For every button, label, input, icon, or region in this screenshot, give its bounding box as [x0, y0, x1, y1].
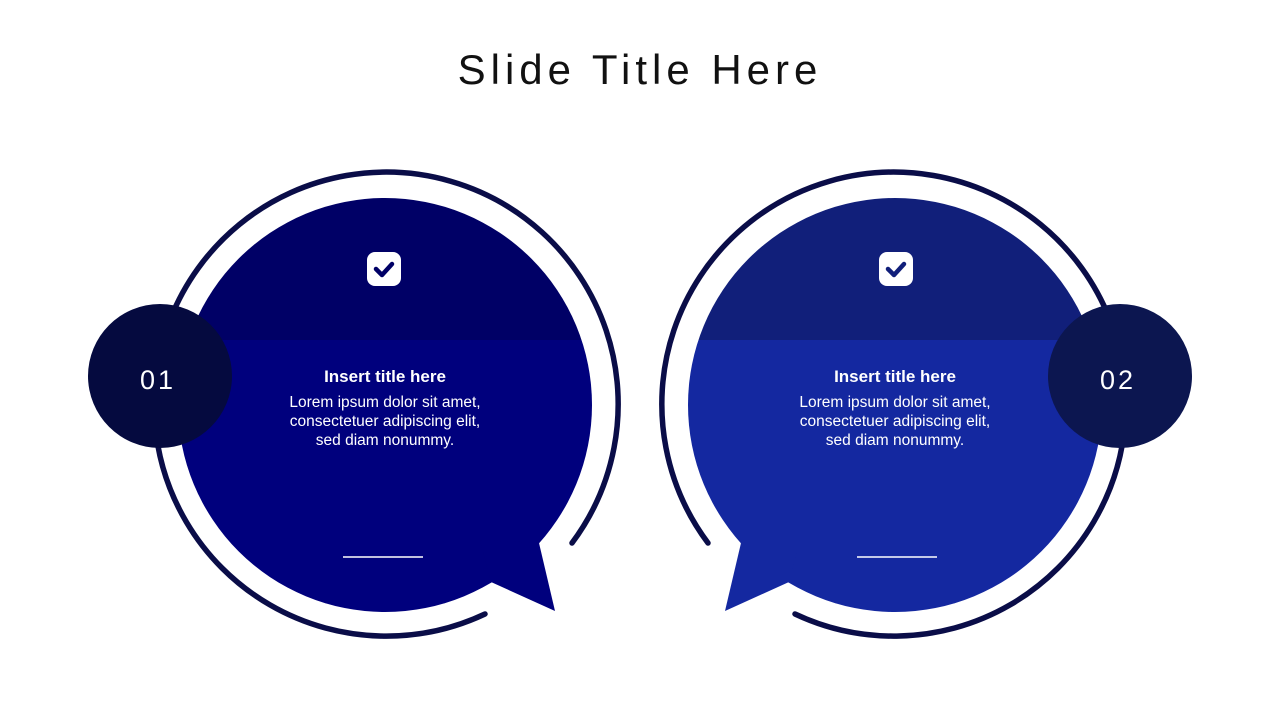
diagram: [88, 169, 1192, 639]
text 1: sed diam nonummy.: [316, 432, 454, 449]
number 02: [1048, 304, 1192, 448]
text 2: consectetuer adipiscing elit,: [800, 413, 990, 430]
ring 1: [154, 172, 618, 636]
icon: check 1: [367, 252, 401, 286]
bubble 1: [170, 190, 600, 620]
number 01: [88, 304, 232, 448]
text 1: [289, 367, 481, 449]
title: Slide Title Here: [458, 46, 822, 93]
panel: item 1: [88, 172, 618, 636]
text 1: Insert title here: [324, 367, 446, 386]
text 2: Insert title here: [834, 367, 956, 386]
panel: item 2: [662, 172, 1192, 636]
number 01: 01: [140, 365, 176, 395]
icon: check 2: [879, 252, 913, 286]
ring 2: [662, 172, 1126, 636]
text 2: [799, 367, 991, 449]
text 2: sed diam nonummy.: [826, 432, 964, 449]
text 1: consectetuer adipiscing elit,: [290, 413, 480, 430]
text 1: Lorem ipsum dolor sit amet,: [289, 394, 481, 411]
bubble 2: [680, 190, 1110, 620]
number 02: 02: [1100, 365, 1136, 395]
text 2: Lorem ipsum dolor sit amet,: [799, 394, 991, 411]
